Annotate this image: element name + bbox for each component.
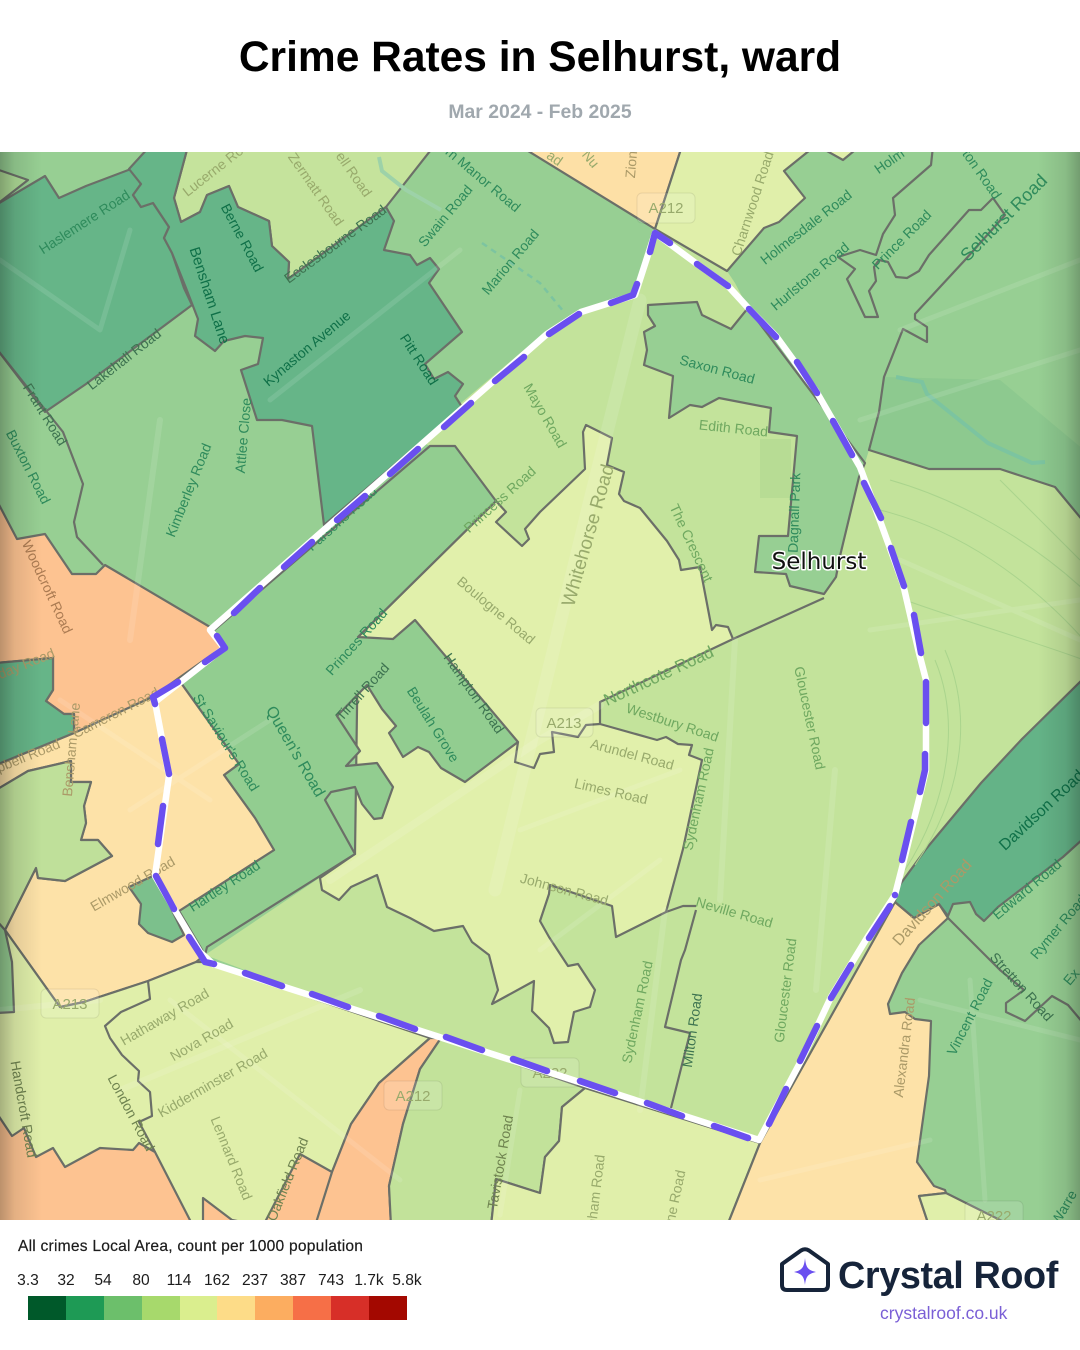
road labels: Mayo Road xyxy=(521,380,570,451)
road labels: Lennard Road xyxy=(208,1114,256,1202)
road number shields: A212 xyxy=(395,1088,431,1105)
area: green inset near Elmwood Road xyxy=(129,875,184,942)
text: 114 xyxy=(167,1272,191,1289)
road labels: Kynaston Avenue xyxy=(260,307,354,389)
road labels: Davidson Road xyxy=(890,857,976,949)
road labels: ton Road xyxy=(959,146,1005,202)
road labels: Johnson Road xyxy=(519,870,610,909)
road labels: Selhurst Road xyxy=(956,170,1051,265)
road labels: Nova Road xyxy=(167,1015,236,1064)
road labels: Kimberley Road xyxy=(162,441,214,539)
area: pale Charnwood xyxy=(655,146,815,271)
road labels: Lucerne Road xyxy=(179,133,259,199)
text: 1.7k xyxy=(354,1272,384,1289)
road labels: Hathaway Road xyxy=(117,985,212,1049)
road labels: Dagnall Park xyxy=(785,471,803,553)
road labels: ad xyxy=(544,147,566,169)
road labels: Nu xyxy=(579,147,603,171)
road labels: Woodcroft Road xyxy=(19,538,76,636)
title: Crime Rates in Selhurst, ward xyxy=(239,34,841,81)
area: orange sliver A212 xyxy=(315,1038,441,1226)
area: pale top fragment xyxy=(826,152,854,162)
text: 3.3 xyxy=(17,1272,39,1289)
road labels: Stretton Road xyxy=(987,949,1057,1024)
road labels: Westbury Road xyxy=(624,700,721,745)
road labels: Alexandra Road xyxy=(890,997,918,1098)
legend colour scale xyxy=(28,1296,407,1320)
road labels: Neville Road xyxy=(694,894,775,931)
road labels: Frant Road xyxy=(20,380,71,448)
road labels: Arundel Road xyxy=(589,735,676,773)
road labels: Marion Road xyxy=(478,226,542,298)
area: darker railway land xyxy=(870,377,1074,508)
road labels: Edward Road xyxy=(989,856,1064,923)
area: darker green Haslemere xyxy=(0,169,192,412)
road labels: Saxon Road xyxy=(678,351,757,387)
place label: Selhurst: Selhurst xyxy=(772,549,866,575)
area: pale south-west xyxy=(0,930,430,1226)
area: dark green Davidson xyxy=(895,678,1080,921)
road labels: ell Road xyxy=(333,149,375,200)
road number shields: A212 xyxy=(648,200,684,217)
road labels: Elmwood Road xyxy=(87,853,178,914)
road labels: Handcroft Road xyxy=(8,1059,40,1159)
road number shields: A213 xyxy=(546,715,582,732)
area: pale south xyxy=(491,1088,760,1226)
road labels: Oakfield Road xyxy=(263,1135,311,1223)
road labels: Lakehall Road xyxy=(84,325,164,393)
road labels: Bensham Lane xyxy=(186,245,233,346)
road labels: Zion xyxy=(622,150,640,179)
area: light green Tavistock xyxy=(389,1038,585,1226)
road number shields xyxy=(41,193,1023,1230)
road labels: Holm xyxy=(871,145,907,177)
road labels: Beulah Grove xyxy=(404,684,463,765)
area: corner light green xyxy=(0,169,28,205)
text: 237 xyxy=(242,1272,268,1289)
logo wordmark: Crystal Roof xyxy=(838,1255,1058,1297)
ward boundary: white line with purple dashes xyxy=(153,233,926,1140)
road labels: Gloucester Road xyxy=(771,937,799,1044)
area: yellow top xyxy=(528,152,679,230)
road labels: Prince Road xyxy=(869,207,934,272)
road labels: Gloucester Road xyxy=(791,665,829,771)
road labels: Bensham Lane xyxy=(59,702,83,797)
area: darker green Kynaston xyxy=(129,146,463,525)
road labels: Cameron Road xyxy=(70,684,162,741)
icon: Crystal Roof house logo xyxy=(780,1247,830,1292)
text: 80 xyxy=(132,1272,150,1289)
road labels: Edith Road xyxy=(698,416,769,440)
text: 54 xyxy=(94,1272,112,1289)
boundary lines xyxy=(0,146,1080,1152)
area: orange south-west base xyxy=(0,1120,331,1220)
road labels: enham Road xyxy=(582,1154,608,1235)
road labels: Hartley Road xyxy=(186,857,263,915)
road labels: ne Road xyxy=(662,1168,688,1224)
area: light green Bensham xyxy=(0,761,112,930)
subtitle: date range: Mar 2024 - Feb 2025 xyxy=(448,101,632,123)
choropleth map xyxy=(0,152,1080,1220)
text: 32 xyxy=(57,1272,75,1289)
area: medium green Queen's Road xyxy=(179,446,518,955)
road labels: Berne Road xyxy=(218,201,267,274)
road labels: Princes Road xyxy=(322,605,390,678)
road labels: Hurlstone Road xyxy=(767,239,852,314)
road labels: London Road xyxy=(105,1072,158,1154)
text: 387 xyxy=(280,1272,306,1289)
legend title: All crimes Local Area, count per 1000 population xyxy=(18,1238,363,1255)
road labels: Northcote Road xyxy=(601,642,717,710)
road labels: Sydenham Road xyxy=(679,746,717,852)
road labels: Attlee Close xyxy=(232,397,254,474)
text: 5.8k xyxy=(392,1272,422,1289)
road labels: Queen's Road xyxy=(262,703,328,800)
road labels: St Saviour's Road xyxy=(190,691,263,794)
area: pale Whitehorse Road xyxy=(320,425,733,1043)
water and rail features xyxy=(379,157,1080,870)
area: main light green ward zone xyxy=(205,229,1080,1143)
area: top light green Lucerne xyxy=(174,146,434,279)
text: 743 xyxy=(318,1272,344,1289)
area: medium green Saxon Road xyxy=(644,302,865,594)
road labels: Hampton Road xyxy=(441,650,508,736)
area: yellow Elmwood xyxy=(0,683,274,1007)
road labels: Ecclesbourne Road xyxy=(281,202,389,286)
area: pale fragment south-east xyxy=(918,1192,1002,1220)
road labels: Parsons Road xyxy=(303,483,380,554)
text: 162 xyxy=(204,1272,230,1289)
road number shields: A213 xyxy=(52,996,88,1013)
area: Dagnall Park playing field xyxy=(760,439,791,498)
road labels: Warre xyxy=(1047,1187,1080,1228)
road labels: Whitehorse Road xyxy=(558,462,619,609)
road labels: The Crescent xyxy=(667,501,717,584)
road labels: Charnwood Road xyxy=(728,149,777,258)
road labels: Princess Road xyxy=(460,463,539,536)
road labels: Milton Road xyxy=(679,992,705,1068)
road network xyxy=(0,230,1080,1215)
road labels: Haslemere Road xyxy=(36,186,133,257)
road labels: Buxton Road xyxy=(3,427,54,506)
road labels: Boulogne Road xyxy=(454,573,538,647)
logo url: crystalroof.co.uk xyxy=(880,1303,1007,1323)
road labels: Vincent Road xyxy=(943,976,996,1058)
area: yellow Alexandra xyxy=(727,902,948,1226)
road labels: Tirrell Road xyxy=(332,660,392,724)
road labels: Zermatt Road xyxy=(285,149,347,229)
road labels: Holmesdale Road xyxy=(757,186,855,268)
road number shields: A222 xyxy=(976,1208,1012,1225)
road number shields: A222 xyxy=(532,1065,568,1082)
road labels: Pitt Road xyxy=(397,331,442,388)
legend scale labels xyxy=(17,1272,422,1289)
area: dark green Day Road xyxy=(0,658,74,765)
road labels: Swain Road xyxy=(415,182,476,250)
area: orange Woodcroft xyxy=(0,499,224,733)
road labels: Kidderminster Road xyxy=(155,1045,270,1121)
road labels: Tavistock Road xyxy=(484,1114,516,1210)
road labels: m Manor Road xyxy=(443,143,524,215)
road labels: Sydenham Road xyxy=(618,959,656,1065)
road labels: Limes Road xyxy=(573,775,649,807)
